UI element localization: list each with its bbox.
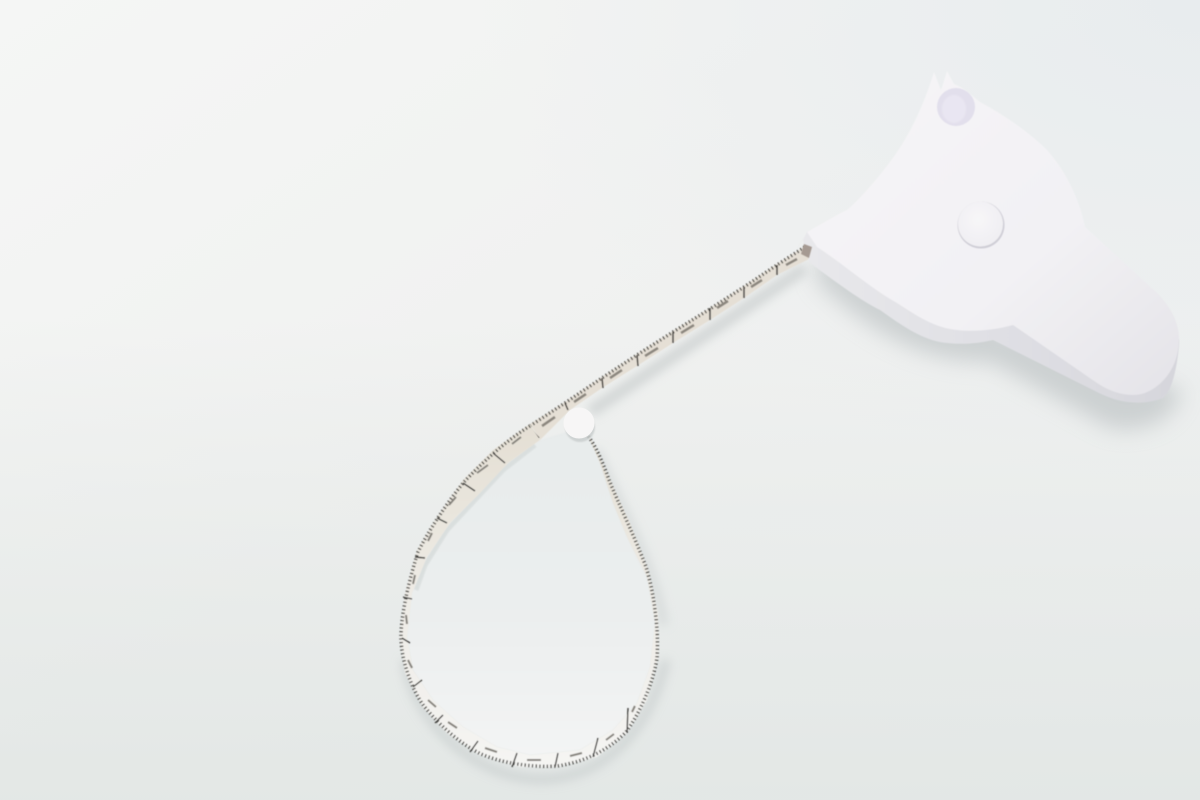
loop inner shadow: [416, 445, 535, 590]
tape loop interior: [407, 425, 655, 755]
loop: printed marks: [406, 437, 635, 760]
loop: scale ticks on outer edge: [401, 426, 657, 766]
device: top face: [807, 71, 1179, 395]
tape: curved loop section: [400, 424, 658, 767]
retractable tape measure device: [801, 71, 1179, 403]
device: side wall: [803, 200, 1179, 403]
tape: major divisions: [528, 265, 777, 438]
device: tape slot: [801, 244, 812, 258]
measuring tape: [400, 243, 811, 767]
loop: major divisions: [402, 453, 628, 767]
tape slider button: [564, 408, 595, 442]
device: finger hole: [937, 88, 975, 126]
shadows under device and tape: [405, 250, 1182, 779]
tape: straight section to device: [528, 243, 811, 440]
tape: printed marks: [542, 259, 797, 426]
tape: scale ticks on upper edge: [530, 245, 808, 426]
device: centre button: [958, 202, 1004, 248]
